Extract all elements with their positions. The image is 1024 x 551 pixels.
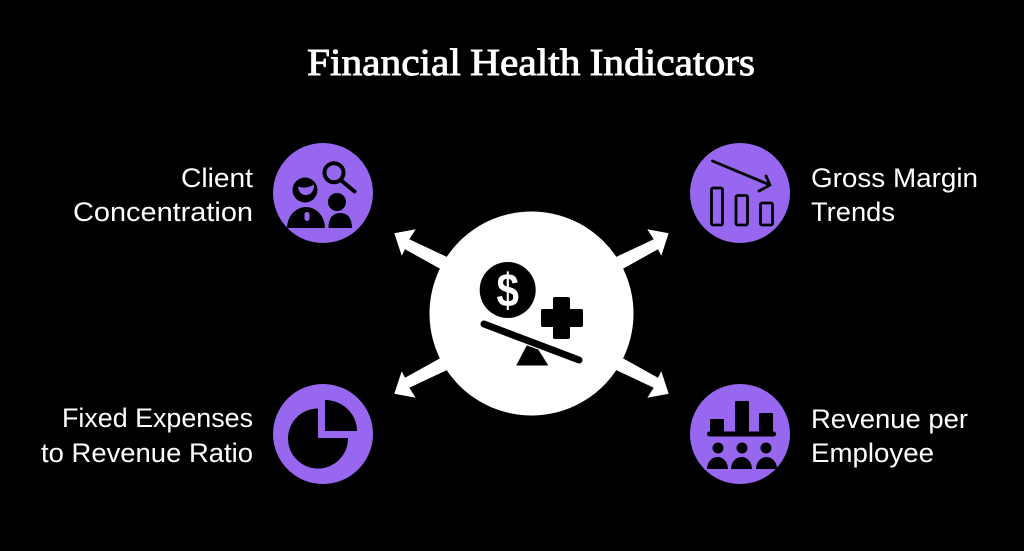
- icon: balance scale: [484, 324, 579, 365]
- icon: declining bars: [690, 143, 790, 243]
- panel: revenue per employee: [690, 384, 968, 484]
- label: Concentration: [73, 197, 253, 227]
- arrow: bottom right: [601, 350, 669, 398]
- label: Trends: [811, 197, 895, 227]
- label: [41, 403, 253, 468]
- arrow: bottom left: [394, 350, 462, 398]
- central hub: [430, 212, 634, 416]
- label: Gross Margin: [811, 163, 978, 193]
- label: to Revenue Ratio: [41, 438, 253, 468]
- label: [811, 404, 968, 468]
- icon: bars and team: [690, 384, 790, 484]
- icon: pie chart: [273, 384, 373, 484]
- label: Employee: [811, 438, 934, 468]
- icon: people with magnifier: [273, 143, 373, 243]
- label: Revenue per: [811, 404, 968, 434]
- icon: medical cross: [541, 297, 583, 339]
- panel: fixed expenses ratio: [41, 384, 373, 484]
- label: [73, 163, 254, 227]
- panel: client concentration: [73, 143, 373, 243]
- title: Financial Health Indicators: [307, 42, 755, 84]
- label: [811, 163, 978, 227]
- icon: dollar coin: [480, 262, 536, 318]
- label: Fixed Expenses: [62, 403, 253, 433]
- icon: dollar coin: $: [496, 264, 519, 317]
- arrow: top right: [601, 229, 669, 277]
- panel: gross margin trends: [690, 143, 978, 243]
- label: Client: [181, 163, 254, 193]
- arrow: top left: [394, 229, 462, 277]
